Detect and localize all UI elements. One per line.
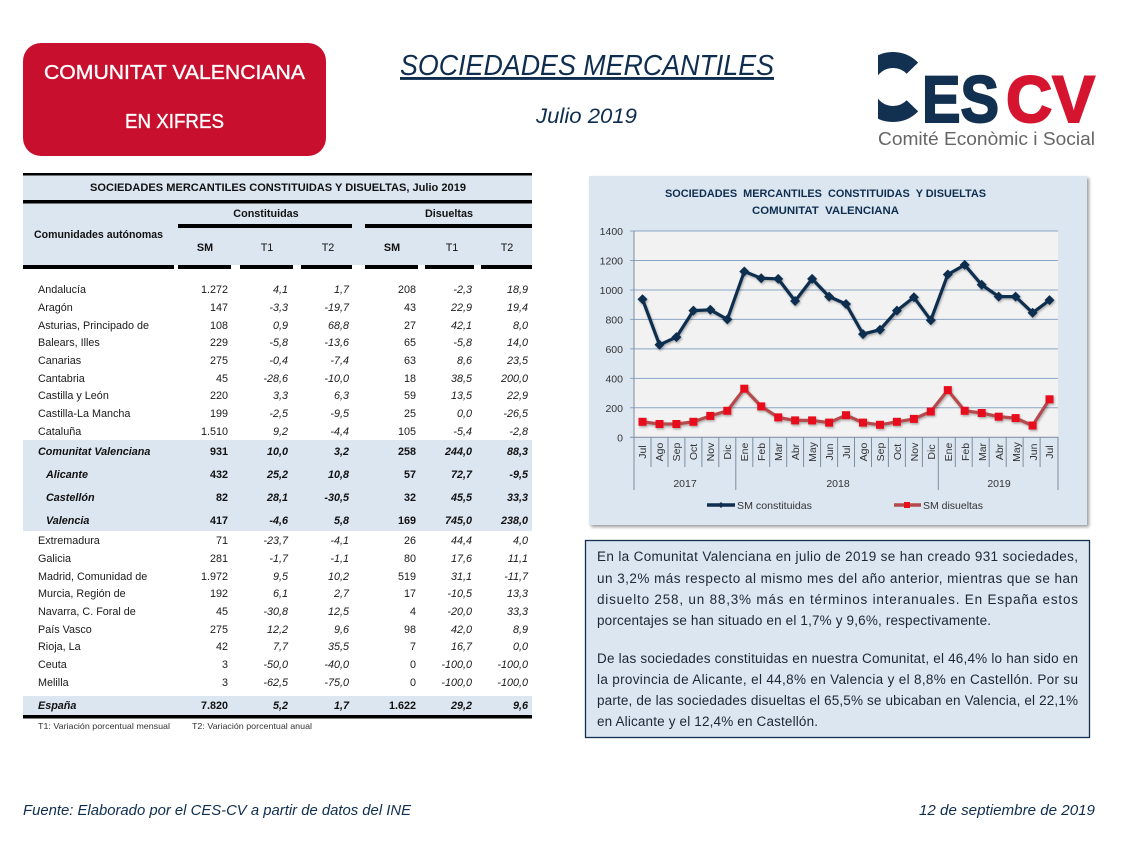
row: Castellón: -30,5: [324, 492, 350, 504]
row: Galicia: 17,6: [451, 553, 472, 565]
month labels: Mar: [977, 442, 989, 461]
row: Madrid: 519: [398, 571, 416, 583]
highlighted band: España: [23, 696, 532, 715]
table header: [23, 173, 532, 269]
month labels: Ago: [654, 443, 666, 461]
row: Melilla: -100,0: [497, 677, 528, 689]
row: Rioja: [38, 641, 528, 653]
row: Ceuta: -40,0: [324, 659, 349, 671]
row: Madrid: -11,7: [504, 571, 529, 583]
row: Balears: [38, 337, 528, 349]
row: Galicia: [38, 553, 528, 565]
row: Asturias: 8,0: [513, 320, 528, 332]
row: Asturias: Asturias, Principado de: [38, 320, 149, 332]
row: Navarra: 45: [216, 606, 228, 618]
panel: commentary text: [586, 540, 1090, 738]
row: España: 1.622: [389, 700, 416, 712]
table footnote: T1: Variación porcentual mensual: [38, 721, 170, 731]
month labels: Jul: [637, 445, 649, 459]
row: Melilla: -62,5: [263, 677, 289, 689]
legend: SM constituidas: [737, 500, 812, 512]
row: Castilla-La Mancha: -26,5: [503, 408, 529, 420]
row: Andalucía: 4,1: [273, 284, 288, 296]
month labels: May: [1011, 441, 1023, 462]
row: Balears: -5,8: [269, 337, 288, 349]
y axis labels: 200: [605, 403, 623, 415]
row: Asturias: [38, 320, 528, 332]
month labels: Feb: [756, 443, 768, 461]
row: Aragón: Aragón: [38, 302, 73, 314]
month labels: Ene: [943, 443, 955, 461]
row: Cataluña: 9,2: [273, 426, 288, 438]
row: Navarra: 4: [410, 606, 416, 618]
row: Castilla y León: 220: [210, 390, 228, 402]
row: Asturias: 108: [210, 320, 228, 332]
table header: T2: [501, 242, 513, 254]
row: Valencia: 745,0: [445, 515, 472, 527]
row: España: 29,2: [450, 700, 472, 712]
y axis labels: [600, 226, 623, 444]
row: Alicante: [45, 469, 529, 481]
footer: date: 12 de septiembre de 2019: [919, 803, 1095, 819]
row: Valencia: 417: [210, 515, 228, 527]
row: Comunitat Valenciana: [38, 446, 528, 458]
row: Murcia: 6,1: [273, 588, 288, 600]
row: Castilla y León: 22,9: [506, 390, 528, 402]
row: Canarias: 275: [210, 355, 228, 367]
row: Andalucía: -2,3: [453, 284, 472, 296]
table header: SM: [384, 242, 400, 254]
row: Galicia: 80: [404, 553, 416, 565]
row: Galicia: Galicia: [38, 553, 71, 565]
row: Extremadura: Extremadura: [38, 535, 100, 547]
row: Castilla-La Mancha: 0,0: [457, 408, 472, 420]
row: Aragón: -3,3: [269, 302, 288, 314]
paragraph 2: parte, de las sociedades disueltas el 65,5% se ubicaban en Valencia, el 22,1%: [597, 693, 1078, 708]
chart title: COMUNITAT VALENCIANA: [752, 205, 899, 217]
row: Valencia: 169: [398, 515, 416, 527]
row: Castilla y León: 3,3: [273, 390, 288, 402]
row: Castilla-La Mancha: -2,5: [269, 408, 289, 420]
row: Canarias: 63: [404, 355, 416, 367]
table header: T1: [446, 242, 458, 254]
table footnote: [38, 721, 312, 731]
row: Castilla y León: 59: [404, 390, 416, 402]
row: Andalucía: [38, 284, 528, 296]
table header: T1: [261, 242, 273, 254]
y axis labels: 1400: [600, 226, 623, 238]
month labels: May: [807, 441, 819, 462]
table footnote: T2: Variación porcentual anual: [192, 721, 312, 731]
row: Rioja: 35,5: [328, 641, 350, 653]
row: País Vasco: 8,9: [513, 624, 528, 636]
row: Castilla y León: 6,3: [334, 390, 349, 402]
row: País Vasco: 9,6: [334, 624, 349, 636]
row: Castilla y León: Castilla y León: [38, 390, 109, 402]
row: Aragón: [38, 302, 528, 314]
row: Balears: Balears, Illes: [38, 337, 100, 349]
row: Cantabria: 38,5: [451, 373, 473, 385]
row: Murcia: 2,7: [333, 588, 350, 600]
row: Rioja: 16,7: [451, 641, 473, 653]
row: Madrid: 9,5: [273, 571, 289, 583]
paragraph 1: disuelto 258, un 88,3% más en términos interanuales. En España estos: [597, 592, 1078, 607]
row: Cantabria: Cantabria: [38, 373, 85, 385]
paragraph 2: en Alicante y el 12,4% en Castellón.: [597, 714, 818, 729]
row: Navarra: -30,8: [263, 606, 288, 618]
y axis labels: 0: [617, 432, 623, 444]
row: Castilla y León: 13,5: [451, 390, 473, 402]
row: Extremadura: -4,1: [330, 535, 349, 547]
month labels: Feb: [960, 443, 972, 461]
row: Castellón: 33,3: [507, 492, 528, 504]
row: Cantabria: 45: [216, 373, 228, 385]
table header: Constituidas: [233, 208, 299, 220]
row: Ceuta: 0: [410, 659, 416, 671]
footer: source: Fuente: Elaborado por el CES-CV a partir de datos del INE: [23, 803, 411, 819]
row: Aragón: -19,7: [324, 302, 350, 314]
row: Castellón: [46, 492, 528, 504]
month labels: Sep: [671, 443, 683, 461]
row: Alicante: 57: [404, 469, 416, 481]
row: Castellón: 82: [216, 492, 228, 504]
month labels: Abr: [994, 443, 1006, 460]
row: Canarias: 8,6: [457, 355, 472, 367]
month labels: Nov: [705, 442, 717, 461]
row: Navarra: 33,3: [507, 606, 528, 618]
row: Cataluña: -2,8: [509, 426, 528, 438]
row: Valencia: [46, 515, 528, 527]
row: Canarias: 23,5: [506, 355, 529, 367]
row: País Vasco: País Vasco: [38, 624, 92, 636]
row: País Vasco: 42,0: [451, 624, 472, 636]
paragraph 2: la provincia de Alicante, el 44,8% en Valencia y el 8,8% en Castellón. Por su: [597, 672, 1078, 687]
month labels: Oct: [892, 444, 904, 460]
row: Balears: 65: [404, 337, 416, 349]
row: Galicia: 281: [210, 553, 228, 565]
row: Canarias: -7,4: [330, 355, 349, 367]
row: Alicante: -9,5: [509, 469, 529, 481]
row: Ceuta: 3: [222, 659, 228, 671]
row: Castellón: 32: [404, 492, 416, 504]
chart title: [665, 188, 986, 217]
month labels: Abr: [790, 443, 802, 460]
row: Aragón: 147: [210, 302, 228, 314]
row: Ceuta: [38, 659, 528, 671]
y axis labels: 800: [605, 314, 623, 326]
y axis labels: 400: [605, 373, 623, 385]
row: Aragón: 19,4: [507, 302, 528, 314]
row: Canarias: -0,4: [269, 355, 288, 367]
paragraph 1: En la Comunitat Valenciana en julio de 2019 se han creado 931 sociedades,: [597, 549, 1078, 564]
row: Navarra: Navarra, C. Foral de: [38, 606, 136, 618]
row: Cantabria: 18: [404, 373, 416, 385]
row: Galicia: -1,1: [330, 553, 349, 565]
month labels: [637, 441, 1056, 462]
row: Melilla: -75,0: [324, 677, 349, 689]
row: Balears: -5,8: [453, 337, 472, 349]
row: Cataluña: Cataluña: [38, 426, 81, 438]
title: SOCIEDADES MERCANTILES: [400, 50, 775, 82]
row: Castellón: Castellón: [46, 492, 95, 504]
row: Murcia: -10,5: [447, 588, 473, 600]
x axis separators: [630, 231, 1058, 490]
plot area: [634, 231, 1058, 437]
row: País Vasco: 98: [404, 624, 416, 636]
row: Cantabria: 200,0: [500, 373, 528, 385]
month labels: Jun: [1028, 443, 1040, 460]
row: Andalucía: 208: [398, 284, 416, 296]
month labels: Nov: [909, 442, 921, 461]
row: Castellón: 28,1: [266, 492, 288, 504]
row: Ceuta: -100,0: [441, 659, 472, 671]
table header: SOCIEDADES MERCANTILES CONSTITUIDAS Y DISUELTAS, Julio 2019: [90, 182, 466, 194]
row: Valencia: -4,6: [269, 515, 289, 527]
row: Extremadura: 71: [216, 535, 228, 547]
header badge: Comunitat Valenciana en xifres: EN XIFRES: [125, 111, 224, 133]
row: España: 9,6: [513, 700, 529, 712]
row: Murcia: 13,3: [507, 588, 528, 600]
y axis labels: 1200: [600, 256, 623, 268]
logo: CES-CV: CV: [1006, 62, 1095, 136]
month labels: Ago: [858, 443, 870, 461]
row: Cantabria: -28,6: [263, 373, 288, 385]
row: Comunitat Valenciana: 258: [398, 446, 416, 458]
year labels: 2017: [673, 478, 697, 490]
row: Comunitat Valenciana: 10,0: [267, 446, 288, 458]
row: Alicante: 432: [210, 469, 228, 481]
row: Aragón: 22,9: [450, 302, 472, 314]
logo: CES-CV: Comité Econòmic i Social: [878, 129, 1095, 149]
row: Extremadura: [38, 535, 528, 547]
row: Galicia: -1,7: [269, 553, 289, 565]
row: Alicante: 25,2: [266, 469, 288, 481]
row: Madrid: Madrid, Comunidad de: [38, 571, 147, 583]
row: Alicante: 10,8: [328, 469, 349, 481]
year labels: 2018: [826, 478, 850, 490]
year labels: [673, 478, 1011, 490]
month labels: Jun: [824, 443, 836, 460]
header badge: Comunitat Valenciana en xifres: [23, 43, 326, 156]
table header: T2: [322, 242, 334, 254]
icon: logo letter C: [866, 60, 912, 114]
row: Rioja: 0,0: [513, 641, 528, 653]
row: España: [38, 700, 529, 712]
row: Melilla: Melilla: [38, 677, 69, 689]
row: Ceuta: Ceuta: [38, 659, 67, 671]
month labels: Dic: [926, 444, 938, 460]
row: Alicante: Alicante: [45, 469, 88, 481]
month labels: Sep: [875, 443, 887, 461]
row: Castilla-La Mancha: -9,5: [330, 408, 350, 420]
row: Castilla-La Mancha: [38, 408, 529, 420]
row: Aragón: 43: [404, 302, 416, 314]
row: País Vasco: [38, 624, 528, 636]
row: Melilla: 3: [222, 677, 228, 689]
row: Balears: 229: [210, 337, 228, 349]
row: Murcia: [38, 588, 528, 600]
row: Andalucía: 18,9: [507, 284, 528, 296]
row: Asturias: 68,8: [328, 320, 349, 332]
row: Comunitat Valenciana: 88,3: [507, 446, 528, 458]
legend: SM disueltas: [923, 500, 983, 512]
row: País Vasco: 12,2: [267, 624, 288, 636]
highlighted band: Comunitat Valenciana: [23, 440, 532, 531]
y axis labels: 1000: [600, 285, 623, 297]
row: Comunitat Valenciana: 244,0: [444, 446, 472, 458]
row: Cataluña: -5,4: [453, 426, 472, 438]
row: Extremadura: 4,0: [513, 535, 528, 547]
row: Murcia: Murcia, Región de: [38, 588, 126, 600]
row: Navarra: [38, 606, 528, 618]
row: Andalucía: Andalucía: [38, 284, 86, 296]
row: Balears: -13,6: [324, 337, 349, 349]
row: Cantabria: [38, 373, 528, 385]
year labels: 2019: [987, 478, 1011, 490]
paragraph 1: [597, 549, 1078, 628]
row: Melilla: [38, 677, 528, 689]
row: Galicia: 11,1: [508, 553, 528, 565]
row: España: España: [38, 700, 76, 712]
chart title: SOCIEDADES MERCANTILES CONSTITUIDAS Y DISUELTAS: [665, 188, 986, 200]
row: Asturias: 42,1: [451, 320, 472, 332]
row: Rioja: 7,7: [273, 641, 289, 653]
row: Madrid: [38, 571, 529, 583]
panel: data table: [23, 173, 532, 731]
row: Cantabria: -10,0: [324, 373, 349, 385]
row: Alicante: 72,7: [451, 469, 473, 481]
table header: Disueltas: [425, 208, 473, 220]
table header: SM: [197, 242, 213, 254]
month labels: Oct: [688, 444, 700, 460]
row: Andalucía: 1,7: [334, 284, 350, 296]
row: Madrid: 31,1: [451, 571, 472, 583]
row: Cataluña: [38, 426, 528, 438]
row: Melilla: -100,0: [441, 677, 472, 689]
row: Valencia: 238,0: [500, 515, 528, 527]
row: Ceuta: -100,0: [497, 659, 528, 671]
month labels: Jul: [1044, 445, 1056, 459]
row: Castilla-La Mancha: Castilla-La Mancha: [38, 408, 130, 420]
row: Castilla-La Mancha: 25: [404, 408, 416, 420]
row: Navarra: -20,0: [447, 606, 472, 618]
row: Castilla y León: [38, 390, 528, 402]
row: Extremadura: -23,7: [263, 535, 289, 547]
subtitle: date: Julio 2019: [535, 105, 637, 128]
row: Canarias: Canarias: [38, 355, 82, 367]
row: Valencia: Valencia: [46, 515, 89, 527]
row: Asturias: 0,9: [273, 320, 288, 332]
paragraph 1: porcentajes se han situado en el 1,7% y 9,6%, respectivamente.: [597, 613, 991, 628]
row: Canarias: [38, 355, 529, 367]
row: Madrid: 1.972: [201, 571, 228, 583]
row: Extremadura: 26: [404, 535, 416, 547]
paragraph 1: un 3,2% más respecto al mismo mes del año anterior, mientras que se han: [597, 571, 1078, 586]
row: Cataluña: 1.510: [201, 426, 228, 438]
row: Comunitat Valenciana: Comunitat Valenciana: [38, 446, 150, 458]
row: Balears: 14,0: [507, 337, 528, 349]
row: Castilla-La Mancha: 199: [210, 408, 228, 420]
logo: CES-CV: [866, 60, 1095, 149]
table header: Comunidades autónomas: [34, 229, 163, 241]
month labels: Mar: [773, 442, 785, 461]
row: España: 5,2: [273, 700, 288, 712]
row: Ceuta: -50,0: [263, 659, 288, 671]
header badge: Comunitat Valenciana en xifres: COMUNITAT VALENCIANA: [44, 62, 306, 84]
panel: line chart: [589, 176, 1087, 525]
month labels: Jul: [841, 445, 853, 459]
paragraph 2: [597, 651, 1078, 729]
row: Extremadura: 44,4: [451, 535, 472, 547]
row: Navarra: 12,5: [328, 606, 350, 618]
legend: [707, 500, 983, 512]
row: Murcia: 192: [210, 588, 228, 600]
logo: CES-CV: ES: [922, 62, 999, 136]
row: Melilla: 0: [410, 677, 416, 689]
row: Comunitat Valenciana: 3,2: [334, 446, 349, 458]
month labels: Ene: [739, 443, 751, 461]
grid and axes: [630, 231, 1058, 408]
month labels: Dic: [722, 444, 734, 460]
row: Valencia: 5,8: [334, 515, 349, 527]
row: Asturias: 27: [404, 320, 416, 332]
row: Comunitat Valenciana: 931: [210, 446, 228, 458]
row: Rioja: 42: [216, 641, 228, 653]
series: SM constituidas: [642, 265, 1050, 345]
series: SM disueltas: [642, 389, 1050, 426]
row: España: 1,7: [334, 700, 350, 712]
paragraph 2: De las sociedades constituidas en nuestra Comunitat, el 46,4% lo han sido en: [597, 651, 1078, 666]
row: Madrid: 10,2: [328, 571, 349, 583]
row: País Vasco: 275: [210, 624, 228, 636]
row: España: 7.820: [201, 700, 228, 712]
y axis labels: 600: [605, 344, 623, 356]
row: Castellón: 45,5: [450, 492, 473, 504]
row: Cataluña: 105: [398, 426, 416, 438]
row: Rioja: 7: [410, 641, 416, 653]
row: Andalucía: 1.272: [201, 284, 228, 296]
row: Cataluña: -4,4: [330, 426, 349, 438]
row: Rioja: Rioja, La: [38, 641, 81, 653]
row: Murcia: 17: [404, 588, 416, 600]
